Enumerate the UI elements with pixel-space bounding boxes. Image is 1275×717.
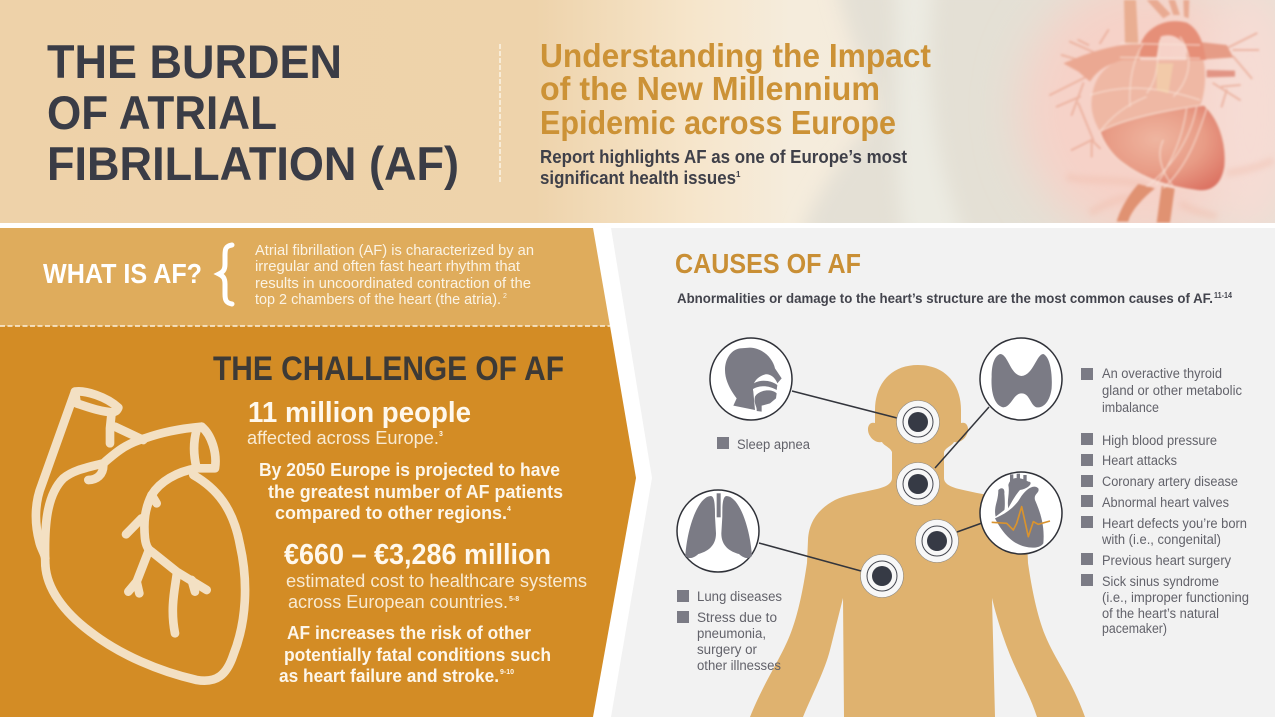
definition text: Atrial fibrillation (AF) is characterized by an [255,243,534,259]
icon: heart with ECG [980,472,1062,554]
main title [47,35,459,190]
text: by 2050 projection [259,460,563,523]
icon: lungs [677,490,759,572]
subtitle: Epidemic across Europe [540,104,896,141]
label: heart conditions: of the heart’s natural [1102,606,1219,621]
definition text: 2 [503,293,507,300]
panel: causes of AF [611,228,1275,717]
highlights [1090,37,1225,191]
text: risk of other conditions [279,623,551,686]
label: lung conditions [677,589,782,673]
body silhouette [750,365,1085,717]
stat: cost: estimated cost to healthcare systems [286,571,587,591]
text: risk of other conditions: 9-10 [500,669,514,676]
report highlights text [540,147,907,188]
icon: head airway [710,338,792,420]
label: lung conditions: Stress due to [697,610,777,625]
panel: the challenge of AF [0,326,636,717]
header banner [0,0,1275,240]
label: heart conditions: Heart attacks [1102,453,1177,468]
label: heart conditions: with (i.e., congenital) [1101,532,1221,547]
definition text: results in uncoordinated contraction of the [255,276,531,292]
label: lung conditions: surgery or [697,642,757,657]
label: lung conditions: Lung diseases [697,589,782,604]
stat: cost [284,539,587,612]
icon: brace [219,245,232,304]
main title: FIBRILLATION (AF) [47,137,459,190]
text: risk of other conditions: potentially fatal conditions such [284,645,551,665]
icon: heart outline [36,391,245,681]
subtitle: of the New Millennium [540,70,880,107]
main title: OF ATRIAL [47,86,277,139]
stat: cost: across European countries. [288,592,508,612]
main title: THE BURDEN [47,35,342,88]
photo: torso and heart [800,0,1275,240]
icon: thyroid [980,338,1062,420]
heading: what is AF: WHAT IS AF? [43,258,202,289]
heading: the challenge: THE CHALLENGE OF AF [213,350,564,388]
label: lung conditions: pneumonia, [697,626,766,641]
stat: 11 million people [247,397,471,448]
stat: cost: €660 – €3,286 million [284,539,551,571]
panel: what is AF [0,228,610,326]
label: thyroid conditions: imbalance [1102,400,1159,415]
label: heart conditions: Previous heart surgery [1102,553,1231,568]
heading: causes: CAUSES OF AF [675,248,861,279]
stat: cost: 5-8 [509,596,519,603]
text: by 2050 projection: the greatest number of AF patients [268,482,563,502]
stat: 11 million people: affected across Europe. [247,428,439,448]
stat: 11 million people: 11 million people [248,397,471,429]
subheading: 11-14 [1214,291,1232,300]
label: heart conditions: pacemaker) [1102,621,1167,636]
label: heart conditions: Coronary artery disease [1102,474,1238,489]
label: thyroid conditions: gland or other metabolic [1102,383,1242,398]
target markers [860,400,958,598]
label: thyroid conditions [1081,366,1242,415]
text: risk of other conditions: AF increases the risk of other [287,623,531,643]
text: by 2050 projection: 4 [507,506,511,513]
label: heart conditions [1081,433,1249,636]
label: heart conditions: (i.e., improper functioning [1102,590,1249,605]
definition text: top 2 chambers of the heart (the atria). [255,292,501,308]
text: by 2050 projection: By 2050 Europe is projected to have [259,460,560,480]
definition text [255,243,534,308]
label: heart conditions: High blood pressure [1102,433,1217,448]
subheading: Abnormalities or damage to the heart’s structure are the most common causes of AF. [677,290,1213,306]
label: heart conditions: Heart defects you’re born [1102,516,1247,531]
text: by 2050 projection: compared to other regions. [275,503,507,523]
stat: 11 million people: 3 [439,431,443,438]
report highlights text: Report highlights AF as one of Europe’s most [540,147,907,167]
label: thyroid conditions: An overactive thyroid [1102,366,1222,381]
label: heart conditions: Sick sinus syndrome [1102,574,1219,589]
label: heart conditions: Abnormal heart valves [1102,495,1229,510]
connector lines [759,391,989,571]
label: sleep apnea: Sleep apnea [737,437,810,452]
report highlights text: 1 [736,170,741,179]
report highlights text: significant health issues [540,168,736,188]
text: risk of other conditions: as heart failure and stroke. [279,666,499,686]
definition text: irregular and often fast heart rhythm that [255,259,520,275]
subtitle: Understanding the Impact [540,37,931,74]
label: lung conditions: other illnesses [697,658,781,673]
subtitle [540,37,931,141]
branching vessels [1050,30,1258,157]
